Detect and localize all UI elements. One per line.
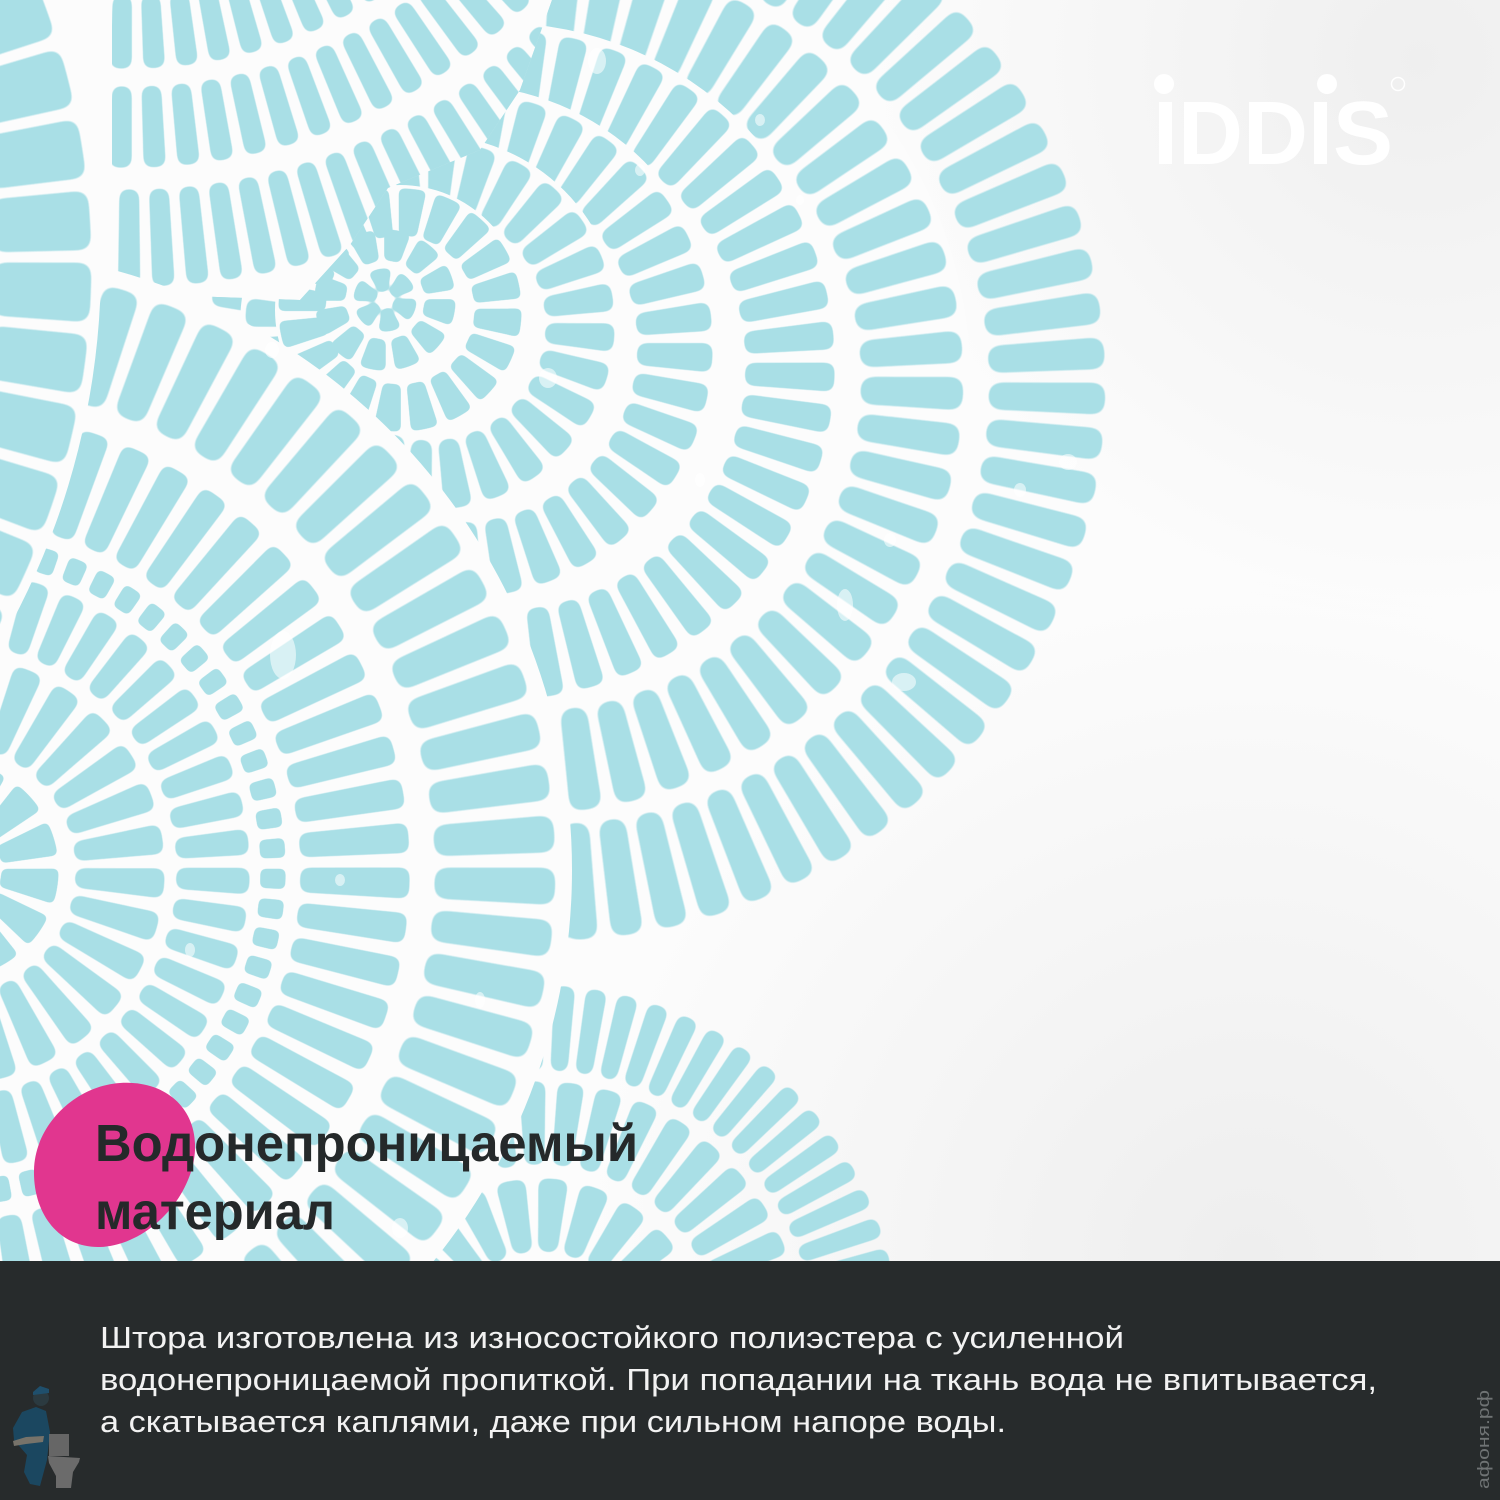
description text: а скатывается каплями, даже при сильном напоре воды. bbox=[100, 1404, 1006, 1439]
description text: водонепроницаемой пропиткой. При попадании на ткань вода не впитывается, bbox=[100, 1362, 1377, 1397]
pattern: main petal medallion bbox=[53, 0, 1047, 882]
pattern: far-left large petals bbox=[0, 0, 101, 1025]
water droplets bbox=[185, 48, 1077, 1238]
description text: Штора изготовлена из износостойкого полиэстера с усиленной bbox=[100, 1320, 1124, 1355]
icon: plumber with toilet bbox=[13, 1386, 80, 1488]
heading bbox=[95, 1115, 638, 1241]
pattern: lower-left petal medallion bbox=[0, 248, 572, 1492]
watermark: site name: афоня.рф bbox=[1474, 1390, 1493, 1489]
logo: IDDIS: IDDIS bbox=[1153, 84, 1393, 184]
heading: Водонепроницаемый bbox=[95, 1115, 638, 1173]
pink blob bbox=[34, 1083, 195, 1247]
description text bbox=[100, 1320, 1377, 1439]
pattern: upper-left petal fan bbox=[112, 0, 552, 300]
heading: материал bbox=[95, 1183, 335, 1241]
dark footer band bbox=[0, 1261, 1500, 1500]
pattern: bottom petal medallion bbox=[223, 1028, 857, 1345]
